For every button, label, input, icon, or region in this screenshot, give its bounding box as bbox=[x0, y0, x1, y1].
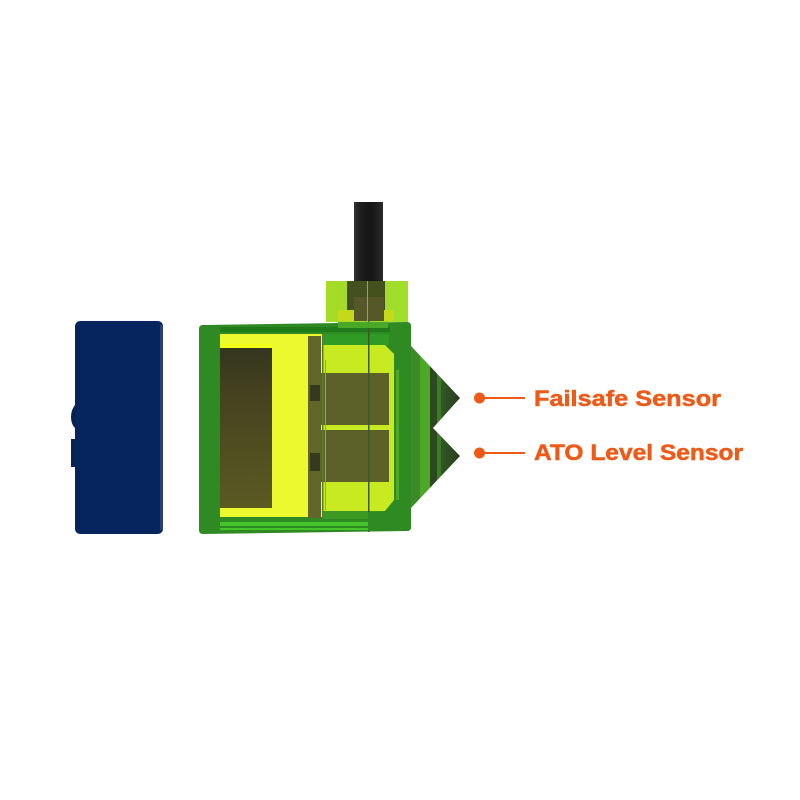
right wall bbox=[368, 334, 411, 531]
black cable bbox=[354, 202, 383, 282]
callout: ATO level sensor bbox=[474, 440, 743, 465]
callout: failsafe sensor: Failsafe Sensor bbox=[534, 386, 721, 411]
blue cover part bbox=[71, 321, 163, 534]
pump body bbox=[199, 320, 411, 534]
motor cavity bbox=[220, 348, 272, 508]
sensor prisms bbox=[411, 340, 461, 515]
callout: failsafe sensor bbox=[474, 386, 721, 411]
callout: ATO level sensor: ATO Level Sensor bbox=[534, 440, 743, 465]
olive column bbox=[308, 336, 321, 518]
collar bbox=[326, 281, 408, 322]
yellow interior bbox=[220, 334, 323, 517]
right chamber bbox=[321, 320, 394, 532]
